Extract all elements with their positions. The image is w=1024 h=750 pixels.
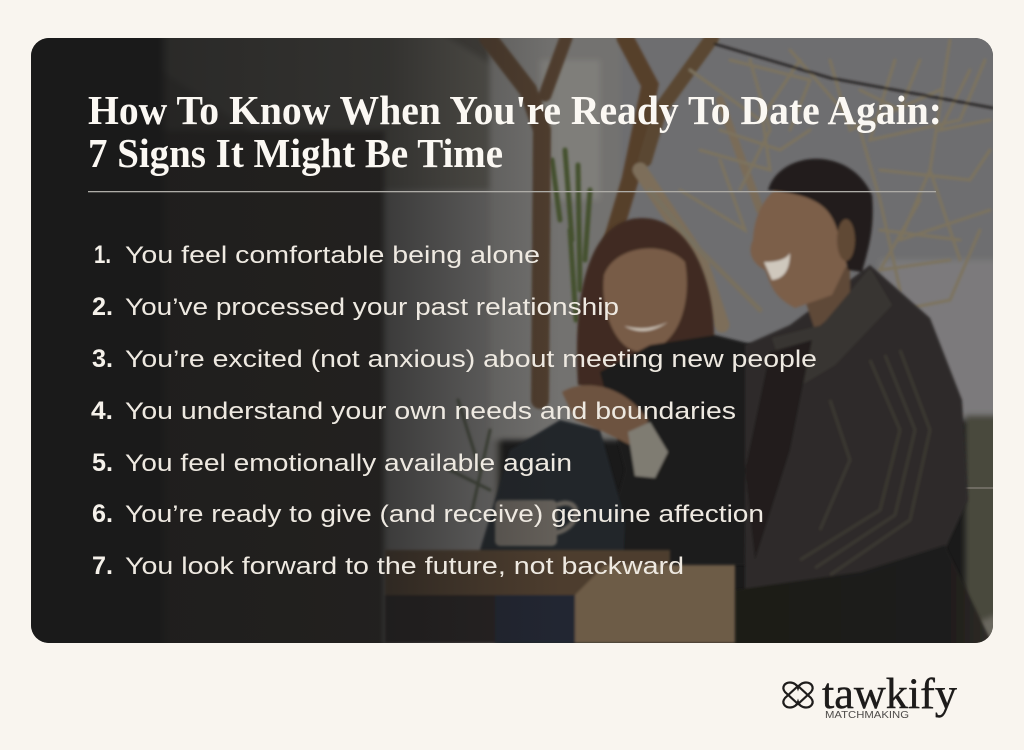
sign 3: 3.	[92, 345, 113, 373]
table and mug	[385, 500, 735, 643]
icon: hanging plant	[450, 150, 590, 520]
sign 5: 5.	[92, 449, 113, 477]
dark left overlay	[31, 38, 528, 643]
sign 4: 4.	[91, 397, 113, 425]
title: 7 Signs It Might Be Time	[88, 130, 503, 176]
logo: tawkify matchmaking: MATCHMAKING	[825, 709, 909, 721]
sign 4: You understand your own needs and boundaries	[125, 398, 736, 425]
sign 1: You feel comfortable being alone	[125, 242, 540, 269]
title divider rule	[88, 191, 936, 192]
sign 7: 7.	[92, 552, 113, 580]
sign 2: You’ve processed your past relationship	[125, 294, 619, 321]
numbered list of seven signs	[91, 241, 817, 580]
logo: tawkify matchmaking: tawkify	[822, 671, 958, 718]
sign 7: You look forward to the future, not backward	[125, 553, 684, 580]
sign 3: You’re excited (not anxious) about meeting new people	[125, 346, 817, 373]
title	[88, 87, 942, 176]
sign 6: You’re ready to give (and receive) genuine affection	[125, 501, 764, 528]
woman	[480, 218, 755, 643]
sign 5: You feel emotionally available again	[125, 450, 572, 477]
icon: interlocked hearts	[783, 682, 813, 708]
tree trunks and branches	[488, 38, 993, 400]
sign 6: 6.	[92, 500, 113, 528]
sign 2: 2.	[92, 293, 113, 321]
man	[744, 157, 990, 643]
sign 1: 1.	[94, 241, 111, 269]
title: How To Know When You're Ready To Date Again:	[88, 87, 942, 133]
